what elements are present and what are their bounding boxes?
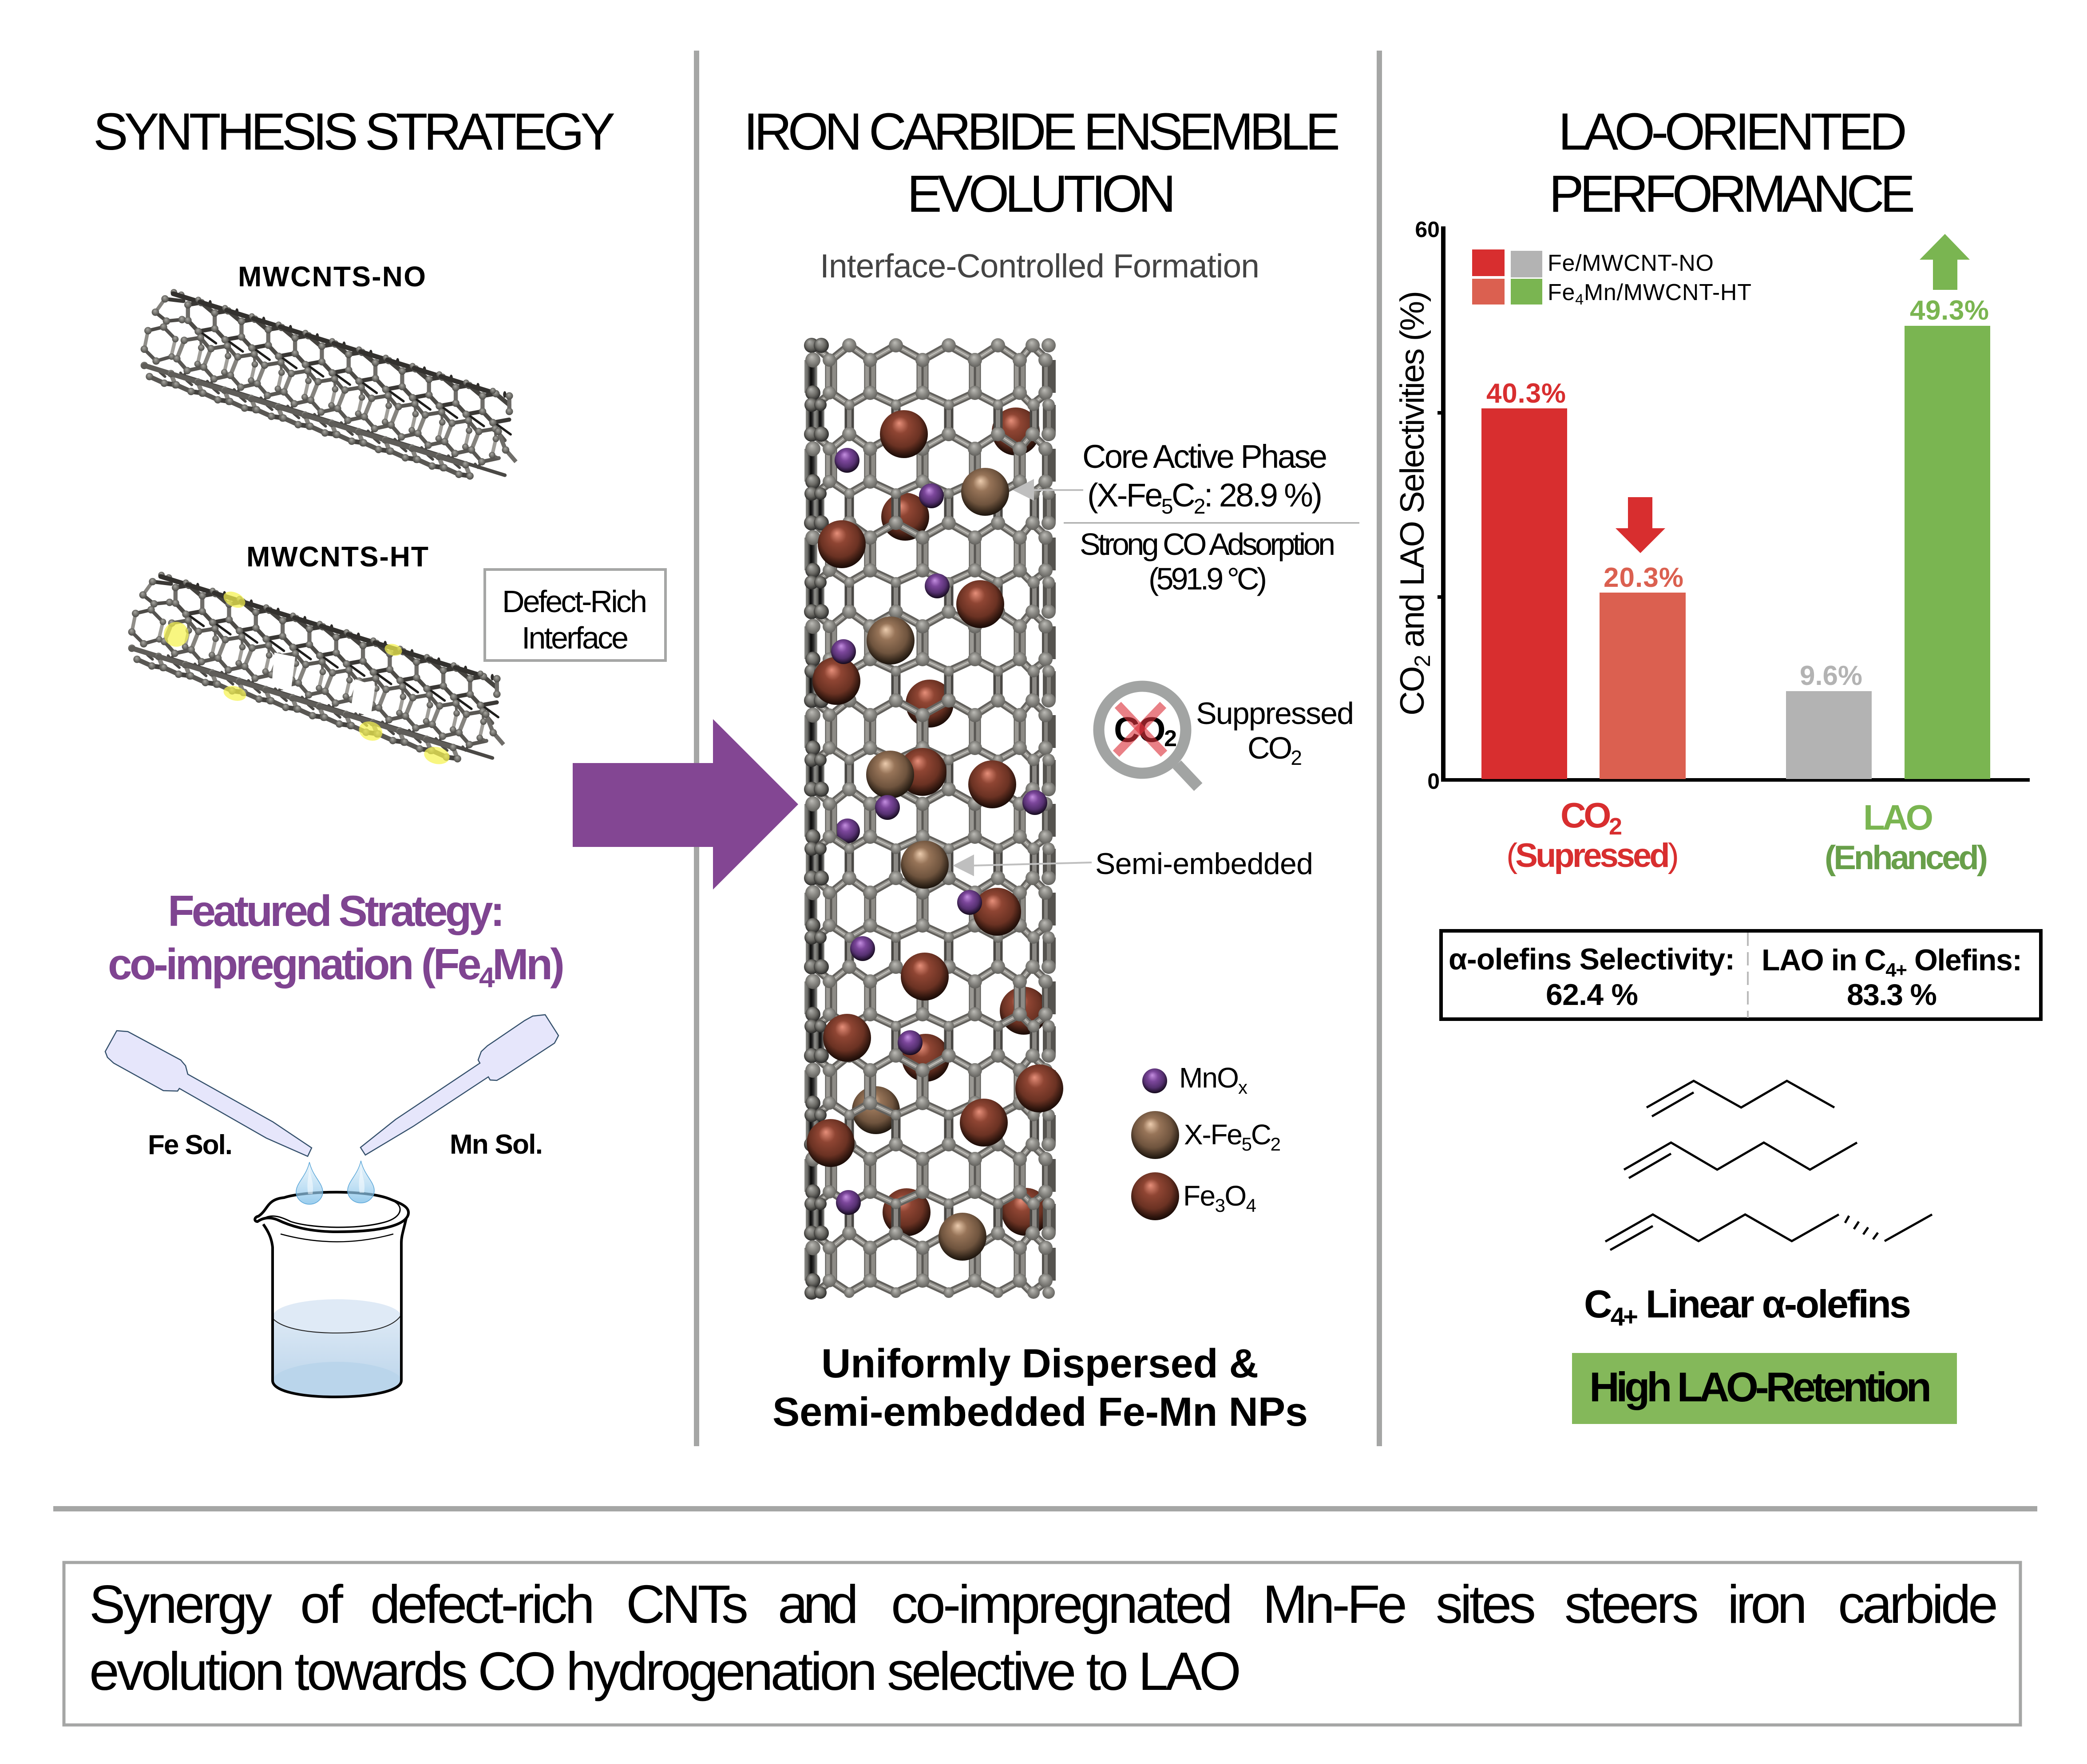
text: core active phase: Core Active Phase [1082, 438, 1327, 475]
arrow: semi-embedded pointer [953, 854, 1092, 876]
panel: iron carbide ensemble evolution [744, 103, 1359, 1435]
callout: defect-rich interface: Interface [522, 621, 629, 655]
label: C4+ linear alpha-olefins: 4+ [1611, 1302, 1638, 1331]
callout: defect-rich interface: Defect-Rich [502, 584, 647, 619]
y axis title: 2 [1410, 655, 1435, 667]
text: suppressed CO2: 2 [1291, 746, 1302, 769]
value labels: 40.3% [1486, 378, 1566, 409]
label: MWCNTS-HT: MWCNTS-HT [246, 541, 428, 573]
conclusion line one: Mn-Fe [1263, 1574, 1407, 1634]
divider: left vertical [694, 51, 699, 1446]
arrow: LAO increase [1920, 234, 1970, 290]
metrics box: Olefins: [1907, 943, 2022, 977]
y axis title: CO [1394, 666, 1431, 716]
conclusion line one [89, 1574, 1998, 1634]
heading: iron carbide ensemble evolution: EVOLUTION [907, 165, 1176, 223]
legend: particle phases: MnO [1179, 1062, 1239, 1094]
bars [1481, 326, 1990, 779]
arrow: purple process arrow [573, 719, 798, 890]
text: core active phase: (X-Fe [1087, 477, 1163, 514]
icon: defective nanotube MWCNTS-HT [128, 572, 503, 767]
category label: LAO: (Enhanced) [1825, 839, 1988, 877]
bar chart: CO2 and LAO selectivities [1394, 217, 2030, 877]
divider: right vertical [1377, 51, 1382, 1446]
text: core active phase: 2 [1194, 495, 1205, 518]
badge: high LAO-retention: High LAO-Retention [1589, 1364, 1932, 1410]
legend: particle phases: C [1251, 1119, 1271, 1151]
text: suppressed CO2: Suppressed [1196, 696, 1354, 731]
arrow: CO2 decrease [1616, 497, 1665, 553]
panel: synthesis strategy [93, 103, 665, 1397]
value labels [1486, 295, 1989, 691]
text: semi-embedded: Semi-embedded [1095, 847, 1313, 881]
legend: particle phases: x [1238, 1077, 1247, 1098]
legend: particle phases: 2 [1271, 1134, 1281, 1155]
text: core active phase: 5 [1161, 495, 1173, 518]
spheres behind the lattice [835, 407, 1049, 1236]
y axis title: and LAO Selectivities (%) [1394, 291, 1431, 656]
value labels: 49.3% [1910, 295, 1989, 326]
category label: CO2: CO [1560, 795, 1611, 835]
heading: iron carbide ensemble evolution [744, 103, 1340, 223]
icon: olefin molecules [1605, 1081, 1932, 1250]
heading: featured strategy: Mn) [492, 940, 565, 989]
legend: particle phases: 3 [1215, 1195, 1225, 1216]
text: core active phase: : 28.9 %) [1204, 477, 1323, 514]
metrics box [1441, 931, 2041, 1019]
legend: Mn/MWCNT-HT [1584, 280, 1751, 305]
label: C4+ linear alpha-olefins: Linear α-olefins [1636, 1282, 1911, 1326]
arrow: core active phase pointer [1013, 479, 1083, 501]
metrics box: 83.3 % [1847, 978, 1937, 1012]
heading: featured strategy: co-impregnation (Fe [108, 940, 482, 989]
legend: particle phases: 5 [1242, 1134, 1252, 1155]
legend: particle phases [1131, 1062, 1281, 1220]
legend: particle phases: X-Fe [1184, 1119, 1243, 1151]
conclusion line one: iron [1727, 1574, 1807, 1634]
conclusion line one: of [300, 1574, 344, 1634]
category label: CO2: (Supressed) [1506, 837, 1679, 874]
subheading: Interface-Controlled Formation [820, 247, 1259, 285]
callout: defect-rich interface [485, 570, 665, 661]
heading: iron carbide ensemble evolution: IRON CARBIDE ENSEMBLE [744, 103, 1340, 161]
heading: featured strategy: Featured Strategy: [168, 886, 505, 935]
text: suppressed CO2 [1196, 696, 1354, 769]
icon: magnifier with crossed CO2 [1099, 686, 1198, 787]
category label: CO2 [1506, 795, 1679, 874]
axes: 60 [1415, 217, 1440, 242]
category label: LAO [1825, 798, 1988, 877]
legend [1472, 249, 1751, 308]
icon: Mn pipette [360, 1015, 558, 1155]
metrics box: 4+ [1885, 959, 1907, 981]
conclusion line one: and [778, 1574, 859, 1634]
category label: CO2: 2 [1609, 813, 1622, 840]
axes [1415, 217, 2030, 794]
icon: Mn droplet [348, 1161, 374, 1203]
label: MWCNTS-NO: MWCNTS-NO [238, 261, 426, 293]
caption: uniformly dispersed [772, 1341, 1308, 1435]
metrics box: LAO in C [1762, 943, 1886, 977]
conclusion line one: carbide [1838, 1574, 1998, 1634]
legend: particle phases: O [1224, 1180, 1247, 1212]
conclusion line one: steers [1564, 1574, 1699, 1634]
conclusion box [64, 1562, 2020, 1725]
axes: 0 [1427, 769, 1440, 794]
conclusion line one: CNTs [626, 1574, 748, 1634]
conclusion line two: evolution towards CO hydrogenation selective to LAO [89, 1641, 1241, 1701]
caption: uniformly dispersed: Uniformly Dispersed & [821, 1341, 1259, 1386]
label: Fe Sol.: Fe Sol. [148, 1130, 233, 1160]
heading: LAO-oriented performance: LAO-ORIENTED [1558, 103, 1907, 161]
conclusion line one: sites [1436, 1574, 1536, 1634]
lattice: carbon nanotube [804, 338, 1056, 1300]
spheres in front of the lattice [807, 410, 1063, 1261]
text: suppressed CO2: CO [1247, 731, 1292, 765]
conclusion line one: defect-rich [370, 1574, 595, 1634]
value labels: 20.3% [1604, 562, 1683, 593]
legend: 4 [1575, 291, 1584, 308]
icon: beaker [255, 1192, 408, 1397]
caption: uniformly dispersed: Semi-embedded Fe-Mn NPs [772, 1389, 1308, 1435]
chart: nanotube with nanoparticles [804, 338, 1063, 1300]
heading: synthesis strategy: SYNTHESIS STRATEGY [93, 103, 615, 161]
heading: LAO-oriented performance: PERFORMANCE [1549, 165, 1915, 223]
legend: particle phases: 4 [1246, 1195, 1256, 1216]
heading: LAO-oriented performance [1549, 103, 1915, 223]
heading: featured strategy [108, 886, 565, 993]
text: core active phase: C [1172, 477, 1195, 514]
panel: LAO-oriented performance [1394, 103, 2041, 1424]
icon: magnifier with crossed CO2: CO [1114, 710, 1166, 749]
legend: particle phases: Fe [1183, 1180, 1216, 1212]
value labels: 9.6% [1800, 661, 1862, 691]
metrics box: α-olefins Selectivity: [1449, 942, 1735, 976]
icon: Fe droplet [296, 1162, 323, 1204]
metrics box: 62.4 % [1546, 978, 1638, 1012]
icon: Fe pipette [105, 1031, 312, 1156]
badge: high LAO-retention [1572, 1353, 1957, 1424]
text: core active phase [1064, 438, 1359, 596]
text: core active phase: Strong CO Adsorption [1080, 527, 1335, 562]
conclusion line one: Synergy [89, 1574, 272, 1634]
legend: Fe [1548, 280, 1575, 305]
icon: magnifier with crossed CO2: 2 [1164, 726, 1177, 751]
label: C4+ linear alpha-olefins: C [1584, 1282, 1612, 1326]
text: core active phase: (591.9 °C) [1148, 562, 1267, 596]
divider: horizontal [53, 1506, 2037, 1511]
label: Mn Sol.: Mn Sol. [450, 1129, 543, 1160]
conclusion line one: co-impregnated [891, 1574, 1233, 1634]
legend: Fe/MWCNT-NO [1548, 250, 1714, 276]
category label: LAO: LAO [1863, 798, 1933, 837]
icon: nanotube MWCNTS-NO [141, 289, 516, 480]
heading: featured strategy: 4 [479, 961, 495, 993]
